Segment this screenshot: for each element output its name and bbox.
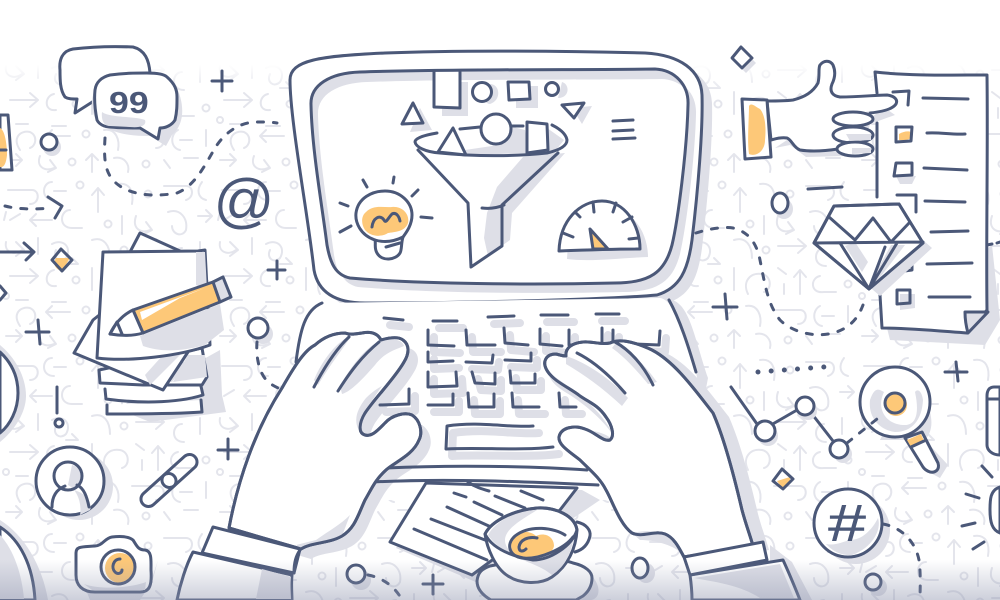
- keyboard keys: [372, 314, 666, 485]
- icon: dashed loop: [696, 227, 863, 335]
- icon: speed gauge: [559, 201, 648, 260]
- icon: coffee cup: [477, 508, 598, 600]
- panel: checklist document: [875, 72, 1000, 345]
- icon: hamburger menu: [613, 120, 635, 139]
- panel: laptop keyboard base: [296, 298, 720, 500]
- icon: large circle at left edge: [0, 345, 26, 442]
- icon: at sign: @: [214, 167, 274, 234]
- icon: sun at right edge: [962, 466, 1000, 549]
- icon: orange diamond left: [0, 249, 72, 300]
- icon: user avatar: [36, 447, 113, 520]
- icon: outlined diamond top right: [732, 47, 756, 73]
- icon: light bulb: [340, 177, 432, 259]
- icon: circle with dashed line, left of laptop: [248, 318, 280, 389]
- icon: exclamation mark: [55, 387, 63, 427]
- icon: small circle bottom right: [865, 574, 887, 596]
- icon: orange card at left edge: [0, 115, 12, 170]
- icon: large shape at lower left edge: [0, 520, 48, 600]
- text: 99 quote mark: 99: [109, 86, 149, 120]
- keyboard front edge: [372, 466, 598, 485]
- decorative dash at right edge: [987, 242, 1000, 245]
- icon: circle with dashed line, bottom: [347, 565, 402, 600]
- bottom shading gradient: [0, 560, 1000, 600]
- icon: notes stack with pencil: [74, 233, 231, 422]
- icon: line chart with dots: [731, 367, 852, 463]
- arrow: dashed arrow left: [5, 197, 62, 218]
- panel: laptop screen: [290, 51, 712, 311]
- icon: camera: [76, 536, 158, 600]
- left hand: [229, 332, 421, 549]
- icon: pointing hand with cuff: [742, 61, 897, 159]
- text: hash symbol: #: [828, 494, 866, 552]
- document under the laptop: [390, 482, 600, 583]
- icon: small orange diamond right: [773, 469, 793, 489]
- icon: small oval, bottom: [632, 558, 655, 583]
- dashed path from speech bubbles: [105, 122, 277, 195]
- arrow: solid arrow left: [0, 243, 34, 260]
- icon: magnifying glass: [847, 367, 948, 478]
- icon: funnel: [415, 114, 567, 267]
- icon: browser window at right edge: [987, 387, 1000, 455]
- icon: pencil: [110, 277, 231, 335]
- icon: small circle: [41, 134, 61, 156]
- icon: diamond gem: [814, 204, 932, 296]
- icon: chain link: [138, 451, 200, 510]
- checklist items: [893, 91, 972, 310]
- right shirt cuff and sleeve: [684, 542, 812, 600]
- right hand: [545, 341, 753, 557]
- icon: hashtag badge: [814, 489, 920, 600]
- icon: speech bubbles: [60, 47, 182, 146]
- icon: falling shapes above the funnel: [402, 72, 592, 132]
- decorative short line and oval: [772, 187, 842, 219]
- hand shadows: [239, 342, 769, 561]
- left shirt cuff and sleeve: [177, 527, 300, 600]
